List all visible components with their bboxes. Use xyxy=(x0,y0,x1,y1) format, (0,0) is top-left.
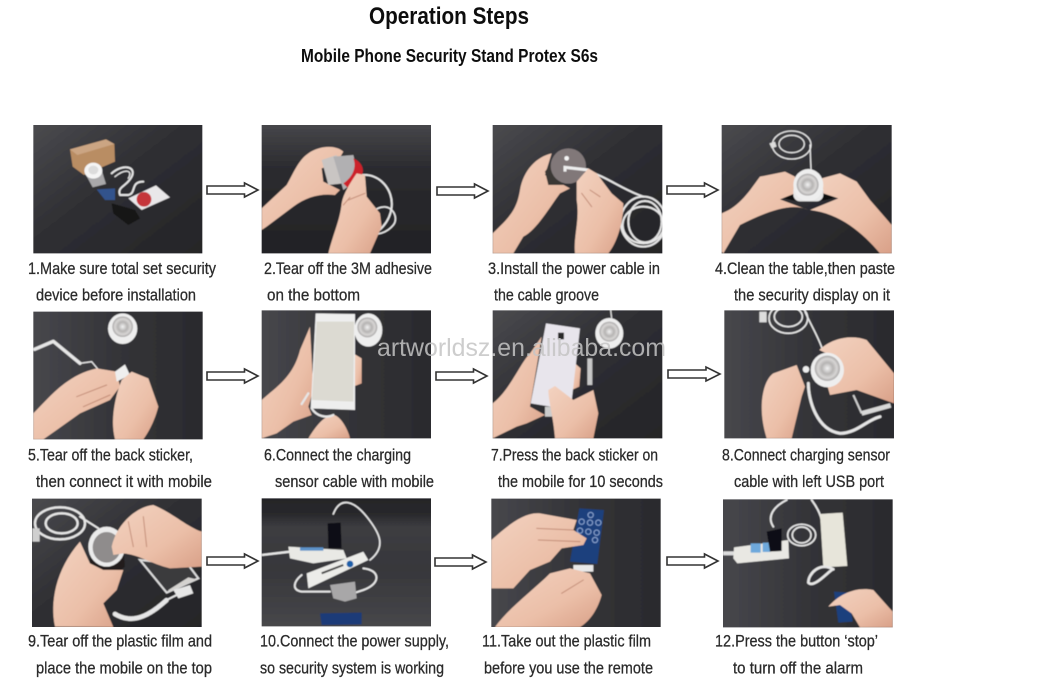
arrow: step 9 to 10 xyxy=(207,554,258,568)
caption: step 9: 9.Tear off the plastic film and xyxy=(28,632,212,650)
photo: taking out remote plastic film xyxy=(488,495,665,630)
caption: step 4: the security display on it xyxy=(734,286,890,304)
arrow: step 3 to 4 xyxy=(667,183,718,197)
arrow: step 7 to 8 xyxy=(668,367,720,381)
panel: step 9 xyxy=(28,495,212,678)
caption: step 11: 11.Take out the plastic film xyxy=(482,632,651,650)
panel: step 7 xyxy=(489,307,666,491)
subtitle: Mobile Phone Security Stand Protex S6s xyxy=(301,46,598,66)
panel: step 1 xyxy=(28,122,216,304)
caption: step 6 xyxy=(264,446,434,491)
caption: step 11: before you use the remote xyxy=(484,658,653,678)
arrow: step 2 to 3 xyxy=(437,184,488,198)
arrow: step 6 to 7 xyxy=(436,369,487,383)
caption: step 8 xyxy=(722,446,890,491)
panel: step 4 xyxy=(715,122,895,304)
panel: step 2 xyxy=(258,122,435,304)
arrow: step 10 to 11 xyxy=(435,555,486,569)
photo: pressing stop on remote xyxy=(720,496,896,631)
caption: step 2: 2.Tear off the 3M adhesive xyxy=(264,259,432,278)
panel: step 11 xyxy=(482,495,665,678)
caption: step 10: so security system is working xyxy=(260,658,444,678)
caption: step 10 xyxy=(260,632,449,678)
caption: step 1: device before installation xyxy=(36,286,196,304)
caption: step 4: 4.Clean the table,then paste xyxy=(715,259,895,278)
photo: connecting cable to left USB port xyxy=(724,310,894,438)
caption: step 1 xyxy=(28,259,216,304)
caption: step 12: to turn off the alarm xyxy=(733,658,863,678)
caption: step 9: place the mobile on the top xyxy=(36,658,212,678)
caption: step 2: on the bottom xyxy=(267,286,360,304)
panel: step 8 xyxy=(721,303,898,491)
photo: installing power cable xyxy=(489,122,666,257)
caption: step 12: 12.Press the button ‘stop’ xyxy=(715,632,878,650)
panel: step 12 xyxy=(715,496,896,678)
caption: step 5: then connect it with mobile xyxy=(36,472,212,491)
panel: step 10 xyxy=(258,495,449,678)
watermark: artworldsz.en.alibaba.com xyxy=(377,334,666,362)
caption: step 1: 1.Make sure total set security xyxy=(28,259,216,278)
caption: step 10: 10.Connect the power supply, xyxy=(260,632,449,650)
caption: step 7 xyxy=(491,446,663,491)
caption: step 8: 8.Connect charging sensor xyxy=(722,446,890,464)
caption: step 8: cable with left USB port xyxy=(734,472,884,491)
caption: step 6: 6.Connect the charging xyxy=(264,446,411,464)
caption: step 7: the mobile for 10 seconds xyxy=(498,472,663,491)
panel: step 6 xyxy=(258,307,435,491)
caption: step 5: 5.Tear off the back sticker, xyxy=(28,446,193,464)
caption: step 2 xyxy=(264,259,432,304)
photo: tearing off plastic film xyxy=(29,495,205,630)
caption: step 11 xyxy=(482,632,653,678)
title: Operation Steps xyxy=(369,3,529,30)
caption: step 6: sensor cable with mobile xyxy=(275,472,434,491)
caption: step 12 xyxy=(715,632,878,678)
caption: step 3: 3.Install the power cable in xyxy=(488,259,660,278)
arrow: step 11 to 12 xyxy=(667,554,718,568)
panel: step 3 xyxy=(488,122,666,304)
photo: connected power supply and stand xyxy=(258,495,435,630)
photo: connecting sensor cable to phone xyxy=(258,307,435,442)
photo: tearing 3M adhesive xyxy=(258,122,435,257)
photo: full device set on table xyxy=(30,122,207,257)
photo: tearing back sticker xyxy=(30,308,207,443)
panel: step 5 xyxy=(28,308,212,491)
photo: pasting display on table xyxy=(718,122,895,257)
photo: pressing back sticker on phone xyxy=(489,307,666,442)
caption: step 4 xyxy=(715,259,895,304)
caption: step 5 xyxy=(28,446,212,491)
caption: step 9 xyxy=(28,632,212,678)
arrow: step 5 to 6 xyxy=(207,369,258,383)
arrow: step 1 to 2 xyxy=(207,183,258,197)
caption: step 3: the cable groove xyxy=(494,286,599,304)
caption: step 3 xyxy=(488,259,660,304)
caption: step 7: 7.Press the back sticker on xyxy=(491,446,658,464)
